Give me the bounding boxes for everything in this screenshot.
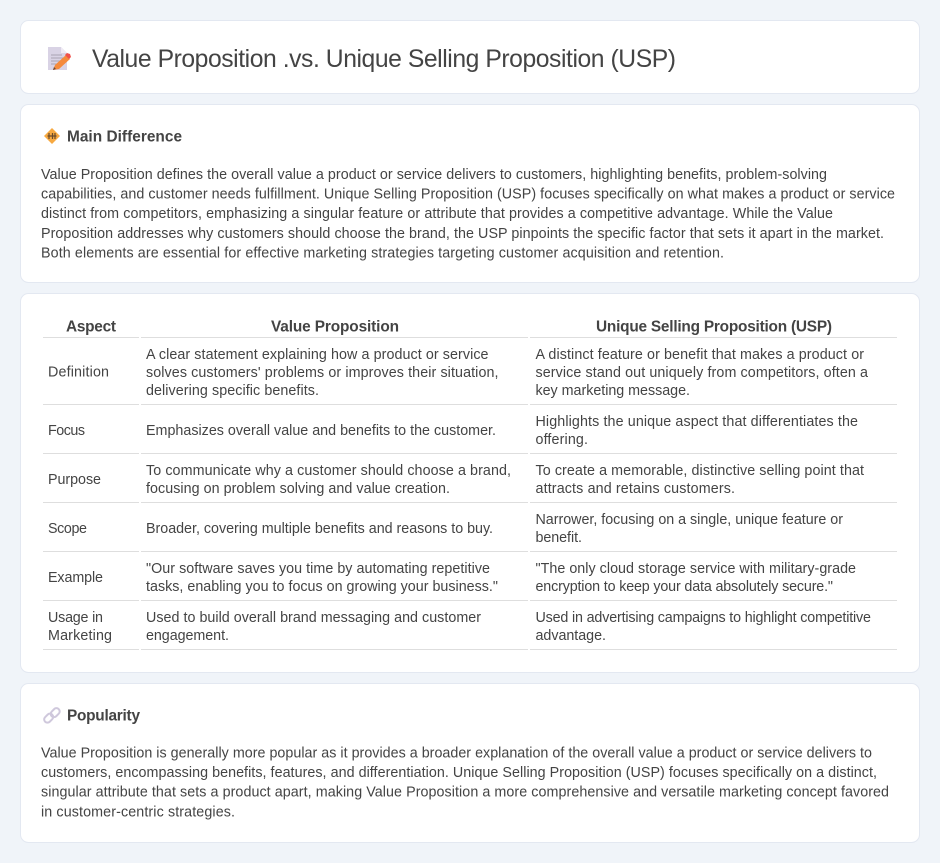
row: usage in marketing: Usage in (48, 610, 103, 626)
heading: main difference: Main Difference (67, 129, 182, 146)
text block: main difference: capabilities, and customer needs fulfillment. Unique Selling Proposition (USP) focuses specifically on what makes a product or service (41, 187, 895, 203)
row: definition: A clear statement explaining how a product or service (146, 347, 489, 363)
row: usage in marketing: Used in advertising campaigns to highlight competitive (536, 610, 871, 626)
text block: main difference: Both elements are essential for effective marketing strategies targeting customer acquisition and retention. (41, 245, 724, 261)
row: focus: Highlights the unique aspect that differentiates the (536, 414, 858, 430)
row: focus: Focus (48, 423, 85, 439)
table header row: Unique Selling Proposition (USP) (596, 319, 832, 336)
row: scope: Scope (48, 521, 87, 537)
text block: main difference: distinct from competitors, emphasizing a singular feature or attribute that provides a competitive advantage. While the Value (41, 206, 833, 222)
row: definition: delivering specific benefits. (146, 383, 319, 399)
panel: title header (20, 20, 920, 94)
row: focus (48, 414, 858, 448)
icon: memo with pencil (48, 47, 71, 70)
row: focus: Emphasizes overall value and benefits to the customer. (146, 423, 496, 439)
row: definition: service stand out uniquely from competitors, often a (536, 365, 868, 381)
row: scope (48, 512, 843, 546)
text block: popularity: in customer-centric strategies. (41, 804, 235, 820)
heading: popularity: Popularity (67, 708, 140, 725)
text block: popularity: singular attribute that sets a product apart, making Value Proposition a more comprehensive and versatile marketing concept favored (41, 785, 889, 801)
icon: chain link (43, 707, 61, 724)
row: usage in marketing: Marketing (48, 628, 112, 644)
row: purpose: Purpose (48, 472, 101, 488)
row: example (48, 561, 856, 595)
row: purpose (48, 463, 864, 497)
text block: main difference: Proposition addresses why customers should choose the brand, the USP pinpoints the specific factor that sets it apart in the market. (41, 226, 884, 242)
row: purpose: focusing on problem solving and value creation. (146, 481, 450, 497)
table header row: Aspect (66, 319, 116, 336)
row: example: "Our software saves you time by automating repetitive (146, 561, 490, 577)
table header row: Value Proposition (271, 319, 399, 336)
text block: popularity: customers, encompassing benefits, features, and differentiation. Unique Selling Proposition (USP) focuses specifically on a distinct, (41, 765, 877, 781)
row: example: "The only cloud storage service with military-grade (536, 561, 856, 577)
row: purpose: To communicate why a customer should choose a brand, (146, 463, 511, 479)
row: example: encryption to keep your data absolutely secure." (536, 579, 833, 595)
panel: popularity (20, 684, 920, 842)
table header row (66, 319, 832, 336)
row: example: Example (48, 570, 103, 586)
text block: main difference: Value Proposition defines the overall value a product or service delivers to customers, highlighting benefits, problem-solving (41, 167, 827, 183)
row: definition: key marketing message. (536, 383, 690, 399)
row: definition (48, 347, 868, 399)
row: focus: offering. (536, 432, 588, 448)
row: example: tasks, enabling you to focus on growing your business." (146, 579, 498, 595)
row: scope: benefit. (536, 530, 582, 546)
row: scope: Narrower, focusing on a single, unique feature or (536, 512, 843, 528)
text block: popularity: Value Proposition is generally more popular as it provides a broader explanation of the overall value a product or service delivers to (41, 746, 872, 762)
row: scope: Broader, covering multiple benefits and reasons to buy. (146, 521, 493, 537)
row: usage in marketing (48, 610, 871, 644)
row: purpose: To create a memorable, distinctive selling point that (536, 463, 864, 479)
panel: main difference (20, 104, 920, 282)
row: definition: Definition (48, 364, 109, 380)
row: usage in marketing: advantage. (536, 628, 606, 644)
panel: comparison table (20, 294, 920, 672)
text block: popularity (41, 746, 889, 820)
row: definition: solves customers' problems or improves their situation, (146, 365, 498, 381)
title: Value Proposition .vs. Unique Selling Proposition (USP) (92, 46, 676, 73)
text block: main difference (41, 167, 895, 261)
row: definition: A distinct feature or benefit that makes a product or (536, 347, 864, 363)
row: usage in marketing: engagement. (146, 628, 229, 644)
row: purpose: attracts and retains customers. (536, 481, 735, 497)
icon: diamond sign (44, 128, 60, 144)
row: usage in marketing: Used to build overall brand messaging and customer (146, 610, 481, 626)
